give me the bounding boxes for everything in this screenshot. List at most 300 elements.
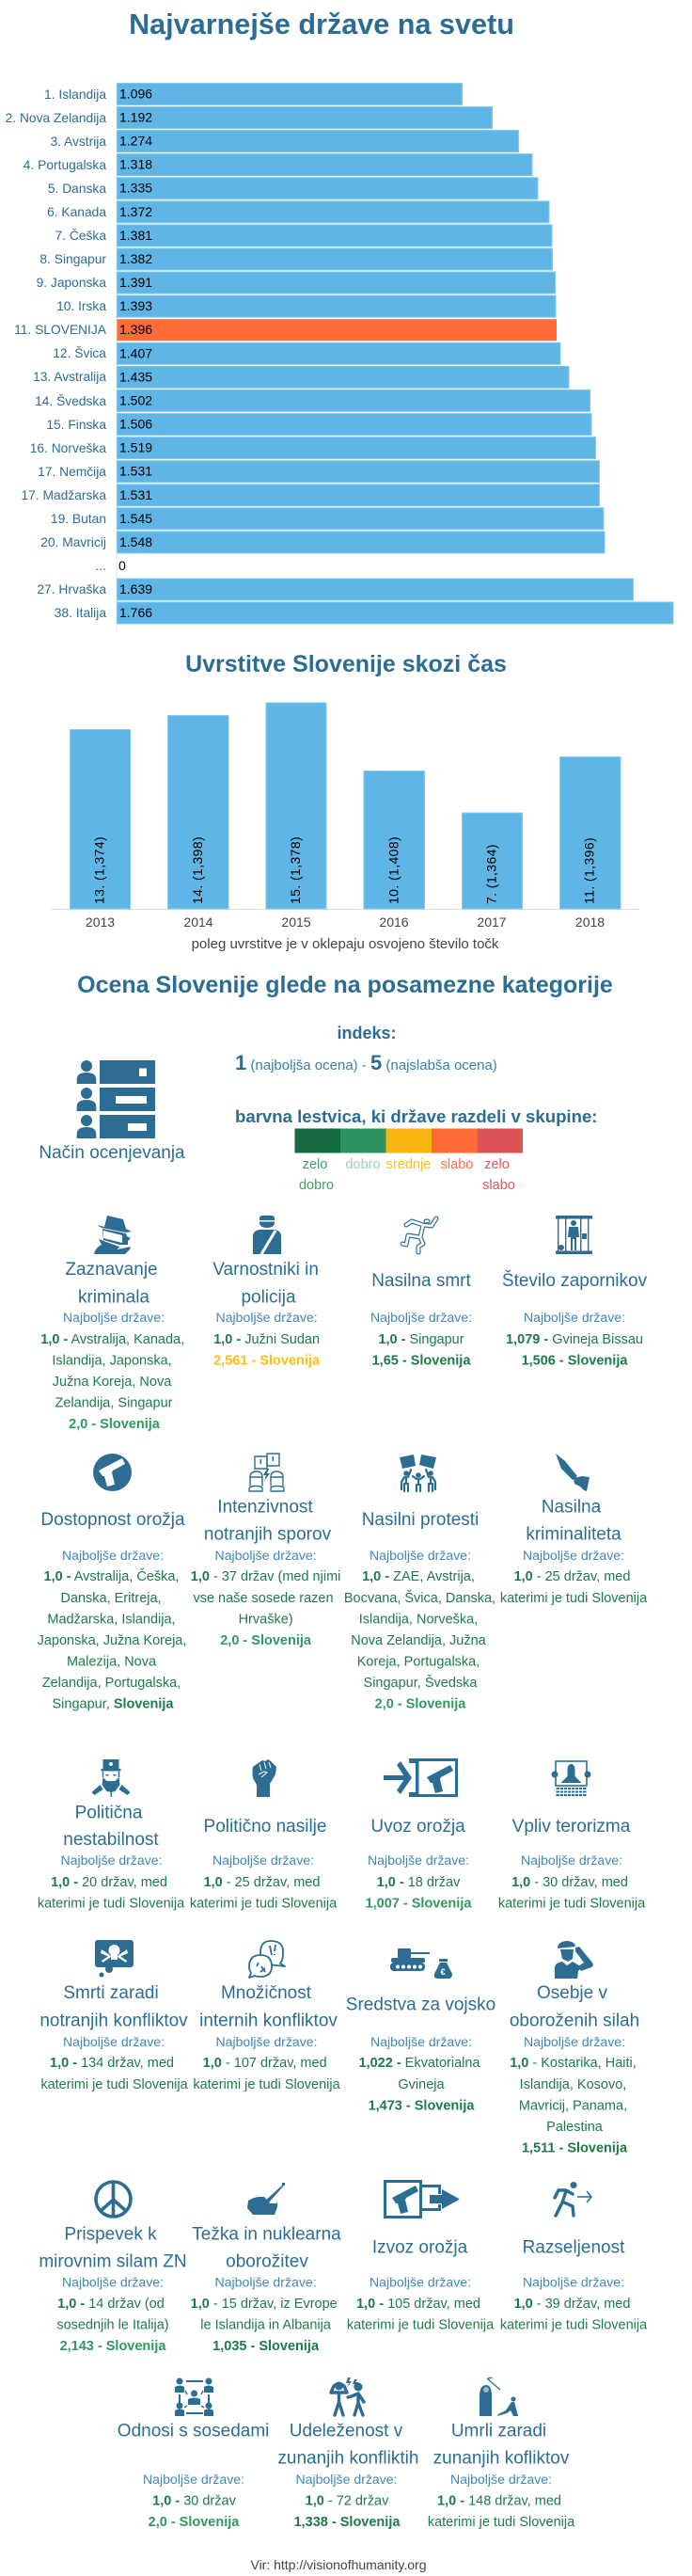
bar: Finska: [46, 414, 591, 435]
icon: export arrow: [385, 2181, 460, 2217]
heading: Nasilna smrt: [371, 1271, 472, 1291]
panel: Umrli zaradi zunanjih konfliktov: [428, 2377, 575, 2530]
bar: Madžarska: 1.531: [119, 487, 152, 502]
bar: Češka: [55, 225, 552, 246]
text: 1,0 - 14 držav (od: [57, 2297, 165, 2312]
panel: Osebje v oboroženih silah: [510, 1941, 639, 2156]
bar: Kanada: 6. Kanada: [47, 205, 106, 219]
heading: Varnostniki in: [212, 1260, 319, 1280]
text: 1,0 - 39 držav, med: [514, 2297, 630, 2312]
text: 1,65 - Slovenija: [372, 1353, 471, 1368]
panel: Prispevek k mirovnim silam ZN: [39, 2182, 187, 2354]
text: 1,0 - 37 držav (med njimi: [191, 1569, 340, 1584]
text: Najboljše države:: [212, 1852, 314, 1868]
bar: Kanada: 1.372: [119, 204, 152, 219]
icon: knife: [556, 1454, 590, 1491]
heading: Udeleženost v: [290, 2422, 403, 2441]
icon: import arrow: [384, 1758, 458, 1797]
text: 1,506 - Slovenija: [522, 1353, 628, 1368]
text: [500, 2275, 648, 2333]
column 2014: [167, 715, 228, 930]
bar: Singapur: 1.382: [119, 251, 152, 266]
text: 1,0 - 30 držav, med: [511, 1875, 628, 1890]
heading: Izvoz orožja: [372, 2237, 468, 2258]
heading: [199, 1983, 338, 2030]
icon: saluting soldier: [555, 1941, 593, 1979]
panel: Težka in nuklearna oborožitev: [191, 2183, 341, 2354]
icon: dispute: [249, 1454, 284, 1491]
panel: Nasilni protesti: [344, 1455, 495, 1712]
text: 2,0 - Slovenija: [220, 1633, 312, 1648]
heading: Dostopnost orožja: [40, 1510, 185, 1530]
bar: Avstralija: [33, 366, 569, 388]
heading: kriminaliteta: [526, 1524, 621, 1545]
bar: Singapur: 8. Singapur: [39, 252, 106, 266]
column 2016: 2016: [379, 914, 409, 930]
panel: Vpliv terorizma: [498, 1761, 646, 1912]
bar: Mavricij: 20. Mavricij: [40, 535, 106, 549]
text: [38, 1852, 185, 1912]
text: Zelandija, Portugalska,: [42, 1676, 181, 1691]
heading: Osebje v: [537, 1983, 607, 2003]
icon: runner with arrow: [555, 2182, 591, 2216]
bar: Singapur: [39, 248, 553, 270]
icon: terrorism screen: [551, 1761, 590, 1797]
bar: Češka: 1.381: [119, 228, 152, 243]
text: katerimi je tudi Slovenija: [193, 2077, 341, 2092]
text: 1,0 - Avstralija, Kanada,: [40, 1332, 184, 1347]
heading: uvrstitve: Uvrstitve Slovenije skozi čas: [185, 651, 507, 677]
text: 1,0 - 105 držav, med: [356, 2297, 480, 2312]
panel: Varnostniki in policija: [212, 1216, 321, 1368]
heading: Težka in nuklearna: [192, 2224, 341, 2245]
bar: Irska: 10. Irska: [56, 299, 106, 313]
icon: method: [77, 1060, 155, 1138]
text: 1,0 - 134 držav, med: [50, 2056, 174, 2071]
text: Najboljše države:: [60, 1852, 163, 1868]
heading: Razseljenost: [523, 2237, 625, 2258]
text: Najboljše države:: [63, 1310, 165, 1325]
icon: tank and money: €: [440, 1967, 446, 1977]
column 2018: 11. (1,396): [581, 837, 596, 904]
column 2017: [463, 813, 523, 930]
heading: Politično nasilje: [204, 1817, 326, 1837]
text: katerimi je tudi Slovenija: [347, 2318, 495, 2333]
icon: chalk outline: [402, 1218, 436, 1252]
column 2016: 10. (1,408): [385, 836, 401, 904]
text: Nova Zelandija, Južna: [351, 1633, 487, 1648]
bar: Madžarska: [21, 485, 600, 506]
scale labels: slabo: [441, 1157, 473, 1172]
text: [190, 1852, 338, 1912]
panel: Intenzivnost notranjih sporov: [191, 1454, 340, 1648]
icon: speech bubbles: [249, 1941, 285, 1978]
text: 2,0 - Slovenija: [69, 1417, 161, 1432]
text: 1,0 - 72 držav: [306, 2493, 389, 2508]
heading: Prispevek k: [64, 2224, 157, 2245]
text: katerimi je tudi Slovenija: [500, 1591, 648, 1606]
text: 1,0 - 107 držav, med: [203, 2056, 327, 2071]
text: Islandija, Norveška,: [359, 1613, 478, 1628]
bar: Japonska: 9. Japonska: [37, 276, 106, 290]
title: Najvarnejše države na svetu: [129, 8, 514, 40]
text: 1,0 - 20 držav, med: [51, 1875, 167, 1890]
gap row: ...: [96, 559, 106, 573]
text: 1,0 - 18 držav: [377, 1875, 461, 1890]
bar: Norveška: 1.519: [119, 440, 152, 455]
text: Južna Koreja, Nova: [53, 1375, 172, 1390]
indeks text: 1 (najboljša ocena) - 5 (najslabša ocena): [235, 1051, 497, 1074]
bar: Finska: 1.506: [119, 416, 152, 431]
scale labels: dobro: [345, 1157, 381, 1172]
text: [347, 2275, 495, 2333]
bar: Norveška: [30, 437, 596, 459]
text: [428, 2472, 575, 2530]
panel: Nasilna kriminaliteta: [500, 1454, 648, 1606]
panel: Sredstva za vojsko: [346, 1948, 495, 2113]
heading: nestabilnost: [63, 1830, 159, 1850]
icon: gun circle: [93, 1454, 132, 1491]
text: Najboljše države:: [370, 2034, 472, 2049]
text: Danska, Eritreja,: [60, 1591, 162, 1606]
source footer: Vir: http://visionofhumanity.org: [250, 2557, 427, 2572]
color scale: [295, 1129, 523, 1153]
heading: zunanjih kofliktov: [433, 2448, 570, 2469]
heading: [526, 1498, 621, 1545]
heading: oborožitev: [226, 2252, 308, 2271]
text: Najboljše države:: [63, 2034, 165, 2049]
column 2015: [266, 703, 326, 930]
text: Najboljše države:: [370, 1310, 472, 1325]
text: Najboljše države:: [62, 2275, 164, 2290]
bar: Švedska: [35, 390, 590, 411]
text: 1,0 - 15 držav, iz Evrope: [191, 2297, 338, 2312]
column 2018: 2018: [575, 914, 605, 930]
icon: arguing people: [331, 2377, 364, 2415]
heading: [192, 2224, 341, 2271]
chart note: poleg uvrstitve je v oklepaju osvojeno število točk: [192, 936, 499, 952]
text: Mavricij, Panama,: [519, 2098, 627, 2113]
column 2017: 2017: [477, 914, 507, 930]
text: Najboljše države:: [521, 1852, 622, 1868]
text: Hrvaške): [239, 1613, 293, 1628]
heading: zunanjih konfliktih: [277, 2448, 418, 2469]
text: 2,561 - Slovenija: [213, 1353, 321, 1368]
panel: Razseljenost: [500, 2182, 648, 2333]
column 2013: 13. (1,374): [92, 836, 107, 904]
heading: notranjih konfliktov: [39, 2012, 188, 2030]
text: [510, 2034, 637, 2156]
panel: Izvoz orožja: [347, 2181, 495, 2333]
heading: Množičnost: [221, 1983, 312, 2003]
text: [40, 1310, 184, 1432]
bar: Nemčija: [38, 461, 600, 483]
panel: Politično nasilje: [190, 1759, 338, 1912]
bar: Danska: [48, 178, 538, 199]
text: Najboljše države:: [450, 2472, 552, 2487]
bar: Avstrija: [50, 130, 519, 152]
bar: Norveška: 16. Norveška: [30, 441, 106, 455]
scale labels: [299, 1157, 515, 1193]
text: [370, 1310, 472, 1368]
panel: Politična nestabilnost: [38, 1759, 185, 1912]
text: 2,0 - Slovenija: [375, 1697, 466, 1712]
panel: Nasilna smrt: [370, 1218, 472, 1368]
column 2013: [70, 730, 130, 930]
heading: Intenzivnost: [217, 1498, 313, 1517]
bar: Irska: [56, 295, 556, 317]
panel: Uvoz orožja: [366, 1758, 472, 1912]
text: 2,0 - Slovenija: [149, 2515, 240, 2530]
text: [191, 2275, 338, 2354]
heading: Odnosi s sosedami: [118, 2422, 269, 2441]
heading: Število zapornikov: [502, 1270, 648, 1291]
panel: Zaznavanje kriminala: [40, 1216, 184, 1432]
bar: Italija: [55, 602, 673, 624]
text: Najboljše države:: [368, 1852, 469, 1868]
text: Japonska, Južna Koreja,: [38, 1633, 186, 1648]
bar: Avstralija: 1.435: [119, 369, 152, 384]
panel: Odnosi s sosedami: [118, 2378, 269, 2530]
text: Najboljše države:: [215, 2275, 317, 2290]
text: vse naše sosede razen: [193, 1591, 334, 1606]
bar: Nemčija: 1.531: [119, 464, 152, 479]
icon: fist: [252, 1759, 276, 1797]
text: Najboljše države:: [62, 1548, 164, 1563]
bar chart: najvarnejše države: [6, 81, 673, 631]
text: 1,0 - 25 držav, med: [204, 1875, 320, 1890]
text: Najboljše države:: [370, 2275, 471, 2290]
bar: Mavricij: [40, 532, 605, 553]
text: Islandija, Japonska,: [52, 1353, 172, 1368]
text: katerimi je tudi Slovenija: [428, 2515, 575, 2530]
bar: Kanada: [47, 201, 549, 223]
text: [500, 1548, 648, 1606]
icon: neighbours network: [175, 2378, 213, 2416]
panel: Množičnost internih konfliktov: [193, 1941, 341, 2092]
icon: reaper and victim: [480, 2377, 518, 2416]
scale labels: dobro: [299, 1178, 334, 1193]
heading: Sredstva za vojsko: [346, 1995, 495, 2015]
bar: Butan: 19. Butan: [51, 512, 106, 526]
text: katerimi je tudi Slovenija: [190, 1897, 338, 1912]
column 2013: 2013: [86, 914, 115, 930]
bar: Japonska: [37, 272, 555, 294]
text: Najboljše države:: [215, 2034, 318, 2049]
bar: Islandija: 1.096: [119, 87, 152, 102]
bar: Danska: 1.335: [119, 181, 152, 196]
text: le Islandija in Albanija: [200, 2318, 332, 2333]
bar: Portugalska: [24, 154, 532, 176]
bar: Islandija: 1. Islandija: [44, 87, 106, 102]
scale labels: zelo: [484, 1157, 510, 1172]
bar: Avstralija: 13. Avstralija: [33, 370, 106, 384]
text: Najboljše države:: [370, 1548, 471, 1563]
text: [56, 2275, 169, 2354]
bar: Irska: 1.393: [119, 298, 152, 313]
heading: [204, 1498, 332, 1545]
bar: Nova Zelandija: [6, 107, 493, 128]
text: Gvineja: [398, 2077, 446, 2092]
text: Koreja, Portugalska,: [357, 1654, 480, 1669]
heading: internih konfliktov: [199, 2012, 338, 2030]
text: [359, 2034, 480, 2113]
text: 1,079 - Gvineja Bissau: [506, 1332, 643, 1347]
text: [344, 1548, 495, 1712]
bar: Hrvaška: 27. Hrvaška: [37, 582, 106, 596]
bar: Danska: 5. Danska: [48, 182, 106, 196]
heading: [277, 2422, 418, 2469]
icon: guard: [253, 1216, 281, 1254]
text: 1,035 - Slovenija: [212, 2339, 320, 2354]
column 2015: 2015: [281, 914, 311, 930]
text: Najboljše države:: [216, 1310, 318, 1325]
bar: Butan: 1.545: [119, 511, 152, 526]
icon: tank and money: [390, 1948, 452, 1979]
text: 1,007 - Slovenija: [366, 1897, 472, 1912]
gap row: [96, 558, 126, 573]
panel: Smrti zaradi notranjih konfliktov: [39, 1940, 189, 2092]
text: Najboljše države:: [215, 1548, 317, 1563]
color scale heading: barvna lestvica, ki države razdeli v skupine:: [235, 1106, 597, 1126]
scale labels: zelo: [303, 1157, 327, 1172]
heading: Uvoz orožja: [370, 1817, 465, 1837]
bar: Nemčija: 17. Nemčija: [38, 465, 106, 479]
heading: mirovnim silam ZN: [39, 2252, 187, 2271]
icon: peace: [96, 2182, 131, 2217]
text: katerimi je tudi Slovenija: [498, 1897, 646, 1912]
bar: Švica: [53, 342, 560, 364]
icon: officer: [92, 1759, 130, 1797]
bar: Slovenija: 11. SLOVENIJA: [14, 323, 107, 337]
text: Najboljše države:: [295, 2472, 398, 2487]
panel: Dostopnost orožja: [38, 1454, 186, 1712]
column 2014: 2014: [183, 914, 213, 930]
text: Najboljše države:: [524, 2034, 625, 2049]
heading: ocena: Ocena Slovenije glede na posamezne kategorije: [77, 972, 613, 998]
text: katerimi je tudi Slovenija: [500, 2318, 648, 2333]
bar: Avstrija: 1.274: [119, 134, 152, 149]
text: Singapur, Slovenija: [53, 1697, 174, 1712]
bar: Japonska: 1.391: [119, 275, 152, 290]
bar: Mavricij: 1.548: [119, 534, 152, 549]
text: [40, 2034, 189, 2092]
text: Bocvana, Švica, Danska,: [344, 1590, 495, 1606]
text: 1,0 - 148 držav, med: [437, 2493, 561, 2508]
bar: Hrvaška: [37, 579, 634, 600]
bar: Finska: 15. Finska: [46, 418, 106, 432]
text: Najboljše države:: [143, 2472, 244, 2487]
text: 1,0 - 25 držav, med: [514, 1569, 630, 1584]
text: katerimi je tudi Slovenija: [38, 1897, 185, 1912]
text: Madžarska, Islandija,: [47, 1613, 176, 1628]
text: [143, 2472, 244, 2530]
heading: Politična: [75, 1803, 143, 1823]
heading: [63, 1803, 159, 1850]
bar: Italija: 38. Italija: [55, 606, 106, 620]
heading: Vpliv terorizma: [512, 1817, 631, 1837]
panel: indeks: [235, 1024, 597, 1193]
text: 2,143 - Slovenija: [60, 2339, 166, 2354]
text: katerimi je tudi Slovenija: [40, 2077, 189, 2092]
text: 1,022 - Ekvatorialna: [359, 2056, 480, 2071]
heading: [510, 1983, 639, 2030]
text: 1,0 - Singapur: [378, 1332, 464, 1347]
text: sosednjih le Italija): [56, 2318, 169, 2333]
panel: Število zapornikov: [502, 1216, 648, 1368]
text: [294, 2472, 401, 2530]
panel: način ocenjevanja: [39, 1060, 185, 1163]
heading: policija: [241, 1287, 296, 1308]
bar: Portugalska: 4. Portugalska: [24, 158, 106, 172]
indeks heading: indeks:: [337, 1024, 397, 1042]
column 2018: [560, 756, 621, 930]
text: 1,338 - Slovenija: [294, 2515, 401, 2530]
bar: Avstrija: 3. Avstrija: [50, 135, 106, 149]
bar: Slovenija: [14, 319, 557, 341]
column 2016: [364, 771, 425, 930]
icon: jail: [556, 1216, 592, 1254]
text: Najboljše države:: [523, 1548, 624, 1563]
column 2014: 14. (1,398): [190, 836, 205, 904]
column chart: uvrstitve Slovenije: [51, 703, 639, 930]
bar: Nova Zelandija: 2. Nova Zelandija: [6, 111, 106, 125]
bar: Italija: 1.766: [119, 605, 152, 620]
heading: [433, 2422, 570, 2469]
column 2015: 15. (1,378): [288, 836, 303, 904]
bar: Švedska: 14. Švedska: [35, 393, 106, 408]
text: [366, 1852, 472, 1912]
bar: Nova Zelandija: 1.192: [119, 109, 152, 124]
text: Najboljše države:: [523, 2275, 624, 2290]
text: 1,511 - Slovenija: [522, 2141, 628, 2156]
gap row: 0: [118, 558, 126, 573]
text: 1,0 - 30 držav: [152, 2493, 237, 2508]
bar: Islandija: [44, 83, 463, 105]
icon: skull bubble: [95, 1940, 134, 1978]
text: Zelandija, Singapur: [55, 1396, 173, 1411]
label: Način ocenjevanja: [39, 1143, 185, 1163]
text: [193, 2034, 341, 2092]
text: [498, 1852, 646, 1912]
heading: [65, 1260, 158, 1308]
text: 1,0 - ZAE, Avstrija,: [362, 1569, 475, 1584]
bar: Butan: [51, 508, 604, 530]
text: Najboljše države:: [524, 1310, 625, 1325]
heading: Smrti zaradi: [63, 1983, 159, 2003]
column 2017: 7. (1,364): [483, 844, 498, 904]
text: [38, 1548, 186, 1712]
bar: Slovenija: 1.396: [119, 322, 152, 337]
heading: Nasilni protesti: [362, 1510, 479, 1530]
bar: Švica: 1.407: [119, 345, 152, 360]
heading: [212, 1260, 319, 1308]
heading: [39, 2224, 187, 2271]
text: Palestina: [546, 2120, 604, 2135]
heading: [39, 1983, 188, 2030]
text: Malezija, Nova: [67, 1654, 157, 1669]
text: [213, 1310, 321, 1368]
text: Singapur, Švedska: [364, 1675, 478, 1691]
text: 1,0 - Južni Sudan: [213, 1332, 320, 1347]
panel: Udeleženost v zunanjih konfliktih: [277, 2377, 418, 2530]
text: 1,0 - Kostarika, Haiti,: [510, 2056, 637, 2071]
text: [506, 1310, 643, 1368]
icon: protest: [400, 1455, 436, 1491]
text: 1,0 - Avstralija, Češka,: [43, 1568, 179, 1584]
scale labels: slabo: [482, 1178, 515, 1193]
heading: Umrli zaradi: [451, 2422, 546, 2441]
